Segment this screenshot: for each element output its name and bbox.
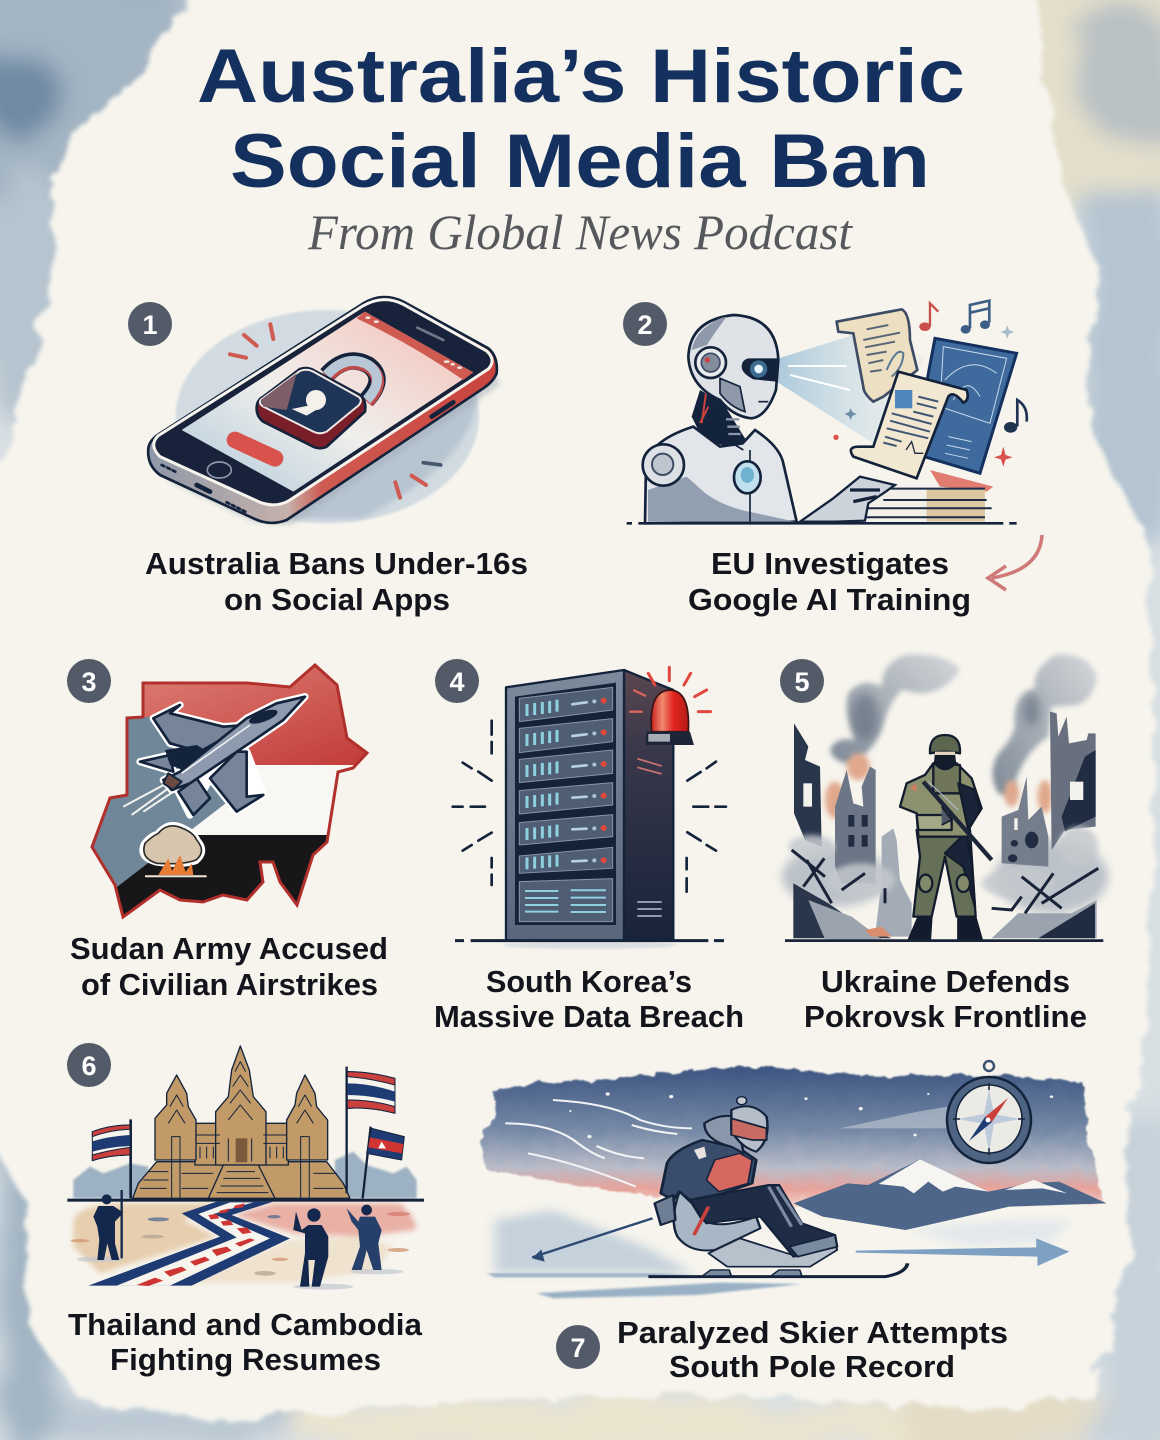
icon: temple border scene [67, 1046, 424, 1290]
panel 5: Ukraine [780, 654, 1108, 1034]
panel 4: South Korea [434, 659, 744, 1034]
label 7: South Pole Record [669, 1349, 955, 1384]
label 2 [688, 546, 971, 617]
icon: skier in polar landscape [478, 1067, 1107, 1298]
label 1: Australia Bans Under-16s [145, 546, 528, 581]
badge 2: 2 [637, 310, 653, 340]
label 2: EU Investigates [711, 546, 949, 581]
music notes and sparkles [833, 301, 1027, 467]
border road [88, 1202, 290, 1286]
label 1: on Social Apps [224, 582, 450, 617]
badge 7: 7 [570, 1333, 586, 1363]
panel 1: social app ban [128, 297, 528, 617]
icon: locked phone [148, 297, 500, 525]
flags [92, 1067, 404, 1198]
icon: fighter jet [123, 697, 305, 815]
badge 2 [623, 302, 667, 346]
title: Social Media Ban [230, 119, 930, 204]
label 6: Thailand and Cambodia [68, 1307, 423, 1342]
icon: robot reading documents [627, 301, 1027, 523]
label 2: Google AI Training [688, 582, 971, 617]
label 5: Pokrovsk Frontline [804, 999, 1087, 1034]
panel 7: Paralyzed skier [478, 1061, 1107, 1384]
map: Sudan flag [90, 663, 370, 920]
title [197, 34, 965, 204]
label 4 [434, 964, 744, 1034]
label 6: Fighting Resumes [110, 1342, 381, 1377]
label 4: Massive Data Breach [434, 999, 744, 1034]
badge 1: 1 [142, 310, 158, 340]
badge 5 [780, 659, 824, 703]
badge 6 [67, 1043, 111, 1087]
label 4: South Korea’s [486, 964, 692, 999]
icon: explosion [142, 824, 207, 876]
badge 4: 4 [449, 667, 465, 697]
label 3 [70, 931, 388, 1002]
label 7: Paralyzed Skier Attempts [617, 1315, 1008, 1350]
badge 5: 5 [794, 667, 810, 697]
badge 7 [556, 1325, 600, 1369]
label 5 [804, 964, 1087, 1034]
arrow: red curved [988, 535, 1042, 590]
subtitle: From Global News Podcast [307, 204, 853, 260]
badge 3: 3 [81, 667, 97, 697]
badge 4 [435, 659, 479, 703]
badge 3 [67, 659, 111, 703]
icon: server with alarm [453, 667, 726, 949]
soldiers [77, 1190, 403, 1290]
label 6 [68, 1307, 423, 1377]
label 5: Ukraine Defends [821, 964, 1070, 999]
panel 3: Sudan [67, 655, 388, 1002]
soldier [900, 735, 982, 939]
direction arrow [856, 1238, 1069, 1266]
label 3: of Civilian Airstrikes [81, 967, 378, 1002]
badge 6: 6 [81, 1051, 97, 1081]
icon: ruined city and soldier [782, 654, 1108, 941]
title: Australia’s Historic [197, 34, 965, 119]
label 3: Sudan Army Accused [70, 931, 388, 966]
badge 1 [128, 302, 172, 346]
label 1 [145, 546, 528, 617]
panel 6: Thailand and Cambodia [67, 1043, 424, 1377]
label 7 [617, 1315, 1008, 1384]
icon: compass [947, 1061, 1031, 1163]
panel 2: EU Google AI [623, 301, 1042, 617]
